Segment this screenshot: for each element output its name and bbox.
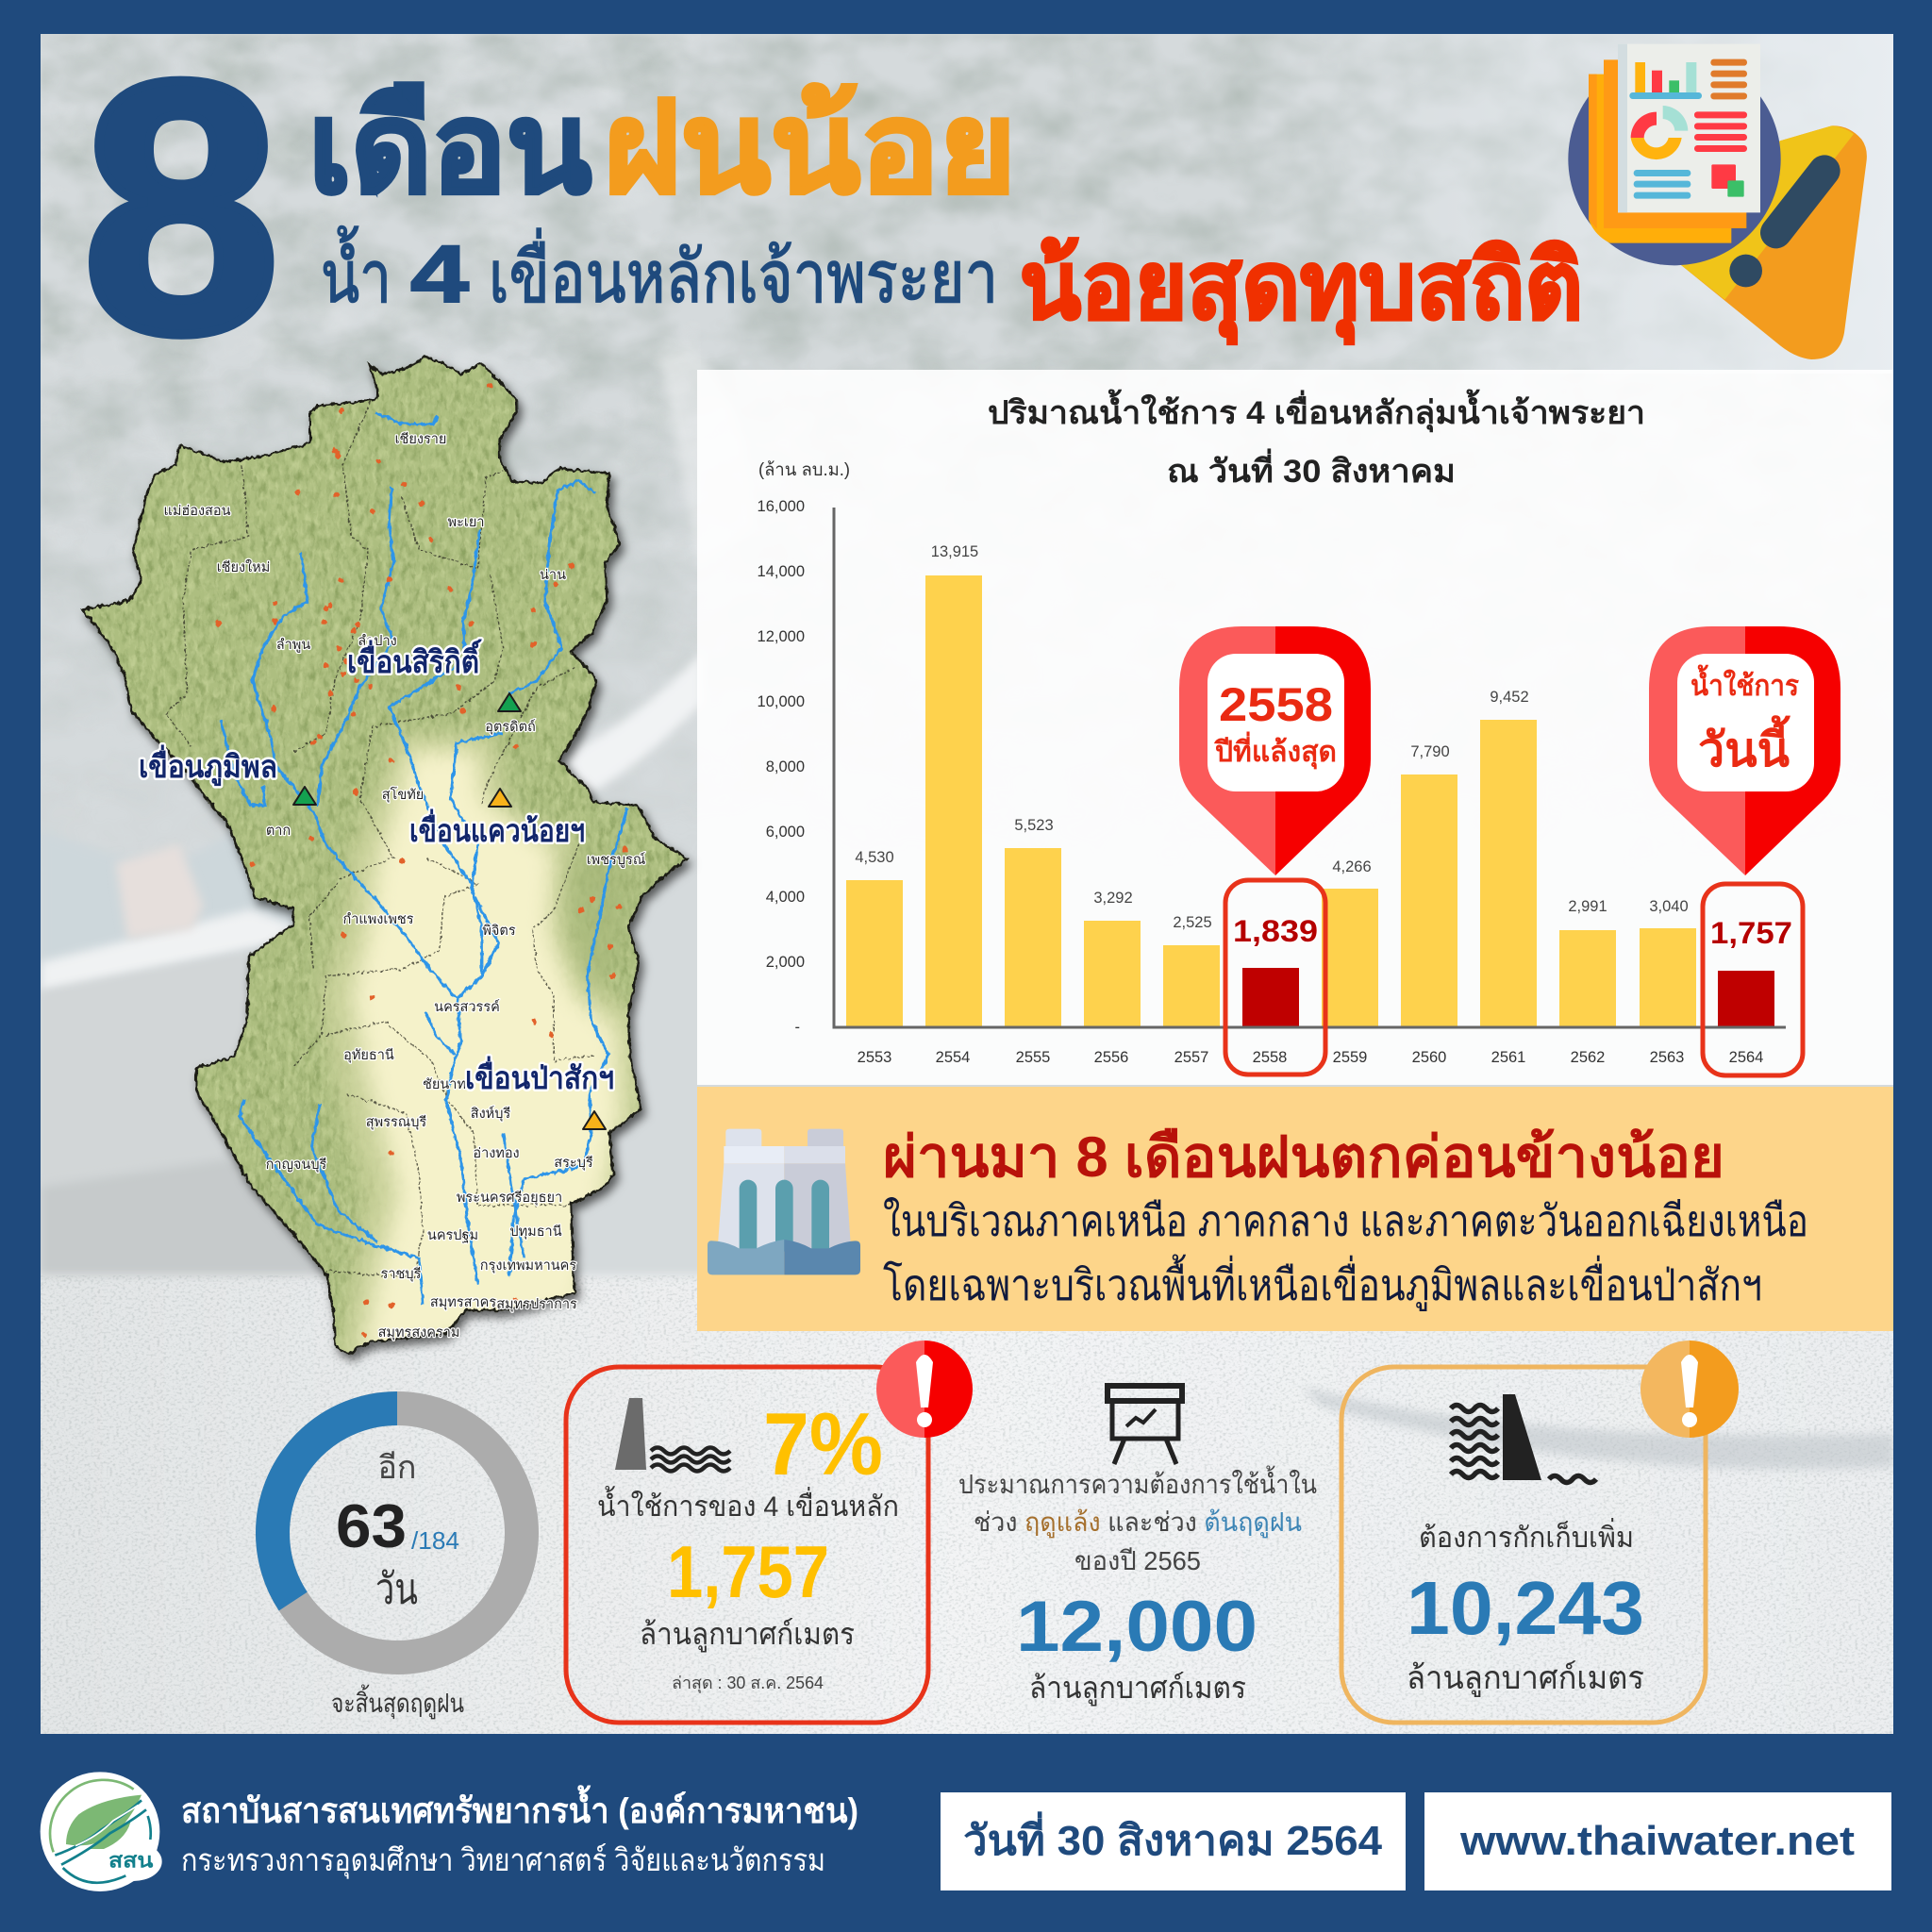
title: line 2: น้อยสุดทุบสถิติ xyxy=(1020,233,1583,344)
chart: value labels: 2,991 xyxy=(1568,898,1607,915)
title: line 1: เดือน xyxy=(308,78,591,219)
title: line 2 xyxy=(321,225,1583,344)
small reservoirs dots xyxy=(219,386,631,1335)
map: province labels: ลำปาง xyxy=(358,634,397,649)
chart: title: ปริมาณน้ำใช้การ 4 เขื่อนหลักลุ่มน้ำเจ้าพระยา xyxy=(988,389,1645,433)
map: province labels: สมุทรสาคร xyxy=(430,1295,496,1310)
chart: axes xyxy=(834,508,1786,1027)
chart: bars xyxy=(846,575,1774,1027)
chart: value labels: 5,523 xyxy=(1014,817,1054,834)
map: province labels: ตาก xyxy=(266,824,291,839)
map: province labels: สมุทรสงคราม xyxy=(378,1325,459,1341)
map: province labels: อ่างทอง xyxy=(473,1146,520,1161)
icon: orange exclamation xyxy=(1641,1341,1739,1438)
map: province labels: สิงห์บุรี xyxy=(471,1106,510,1122)
chart: y axis labels: 12,000 xyxy=(758,628,805,645)
map: dam name labels: เขื่อนสิริกิติ์ xyxy=(347,639,482,679)
card: additional storage needed 10,243: ต้องการกักเก็บเพิ่ม xyxy=(1419,1518,1634,1554)
callout pin: 2558 driest year: ปีที่แล้งสุด xyxy=(1213,731,1337,770)
icon: red exclamation xyxy=(876,1341,973,1438)
map: province labels: พะเยา xyxy=(448,515,484,530)
map: province labels: สุพรรณบุรี xyxy=(366,1114,426,1130)
footer: logo: สสน xyxy=(108,1848,153,1872)
block: forecast demand 12,000: ช่วง ฤดูแล้ง และช่วง ต้นฤดูฝน xyxy=(974,1507,1302,1539)
block: forecast demand 12,000 xyxy=(958,1386,1317,1707)
map: province labels: กำแพงเพชร xyxy=(342,912,414,927)
map: dam triangles xyxy=(293,693,606,1129)
callout pin: today's usable water: น้ำใช้การ xyxy=(1690,664,1799,702)
chart: highlight frames with values xyxy=(1225,880,1803,1075)
icon: report papers and warning sign xyxy=(1568,44,1867,359)
map: province labels: อุตรดิตถ์ xyxy=(485,719,536,735)
chart: year labels: 2562 xyxy=(1571,1049,1605,1066)
chart: year labels: 2553 xyxy=(858,1049,891,1066)
card: usable water 7%: 7% xyxy=(763,1394,883,1493)
donut: days remaining: จะสิ้นสุดฤดูฝน xyxy=(331,1684,464,1720)
title: line 2: 4 xyxy=(410,229,469,320)
map: province labels: นครปฐม xyxy=(427,1228,478,1243)
footer: date box xyxy=(941,1792,1406,1890)
map: province labels: สุโขทัย xyxy=(382,786,424,803)
panel: orange summary xyxy=(697,1087,1893,1331)
panel: orange summary: โดยเฉพาะบริเวณพื้นที่เหนือเขื่อนภูมิพลและเขื่อนป่าสักฯ xyxy=(883,1254,1762,1311)
callout pin: today's usable water: วันนี้ xyxy=(1698,715,1790,776)
map: province labels: พระนครศรีอยุธยา xyxy=(457,1190,562,1206)
chart: value labels: 4,266 xyxy=(1332,858,1372,875)
chart: year labels: 2561 xyxy=(1491,1049,1525,1066)
title: line 2: เขื่อนหลักเจ้าพระยา xyxy=(489,228,998,318)
chart: value labels: 3,292 xyxy=(1093,890,1133,907)
chart: value labels: 7,790 xyxy=(1410,743,1450,760)
chart: year labels: 2555 xyxy=(1016,1049,1050,1066)
map: province labels: ปทุมธานี xyxy=(509,1224,562,1240)
map: province labels: น่าน xyxy=(540,568,566,583)
chart: year labels: 2558 xyxy=(1253,1049,1287,1066)
donut: days remaining: วัน xyxy=(375,1564,418,1613)
card: usable water 7%: ล่าสุด : 30 ส.ค. 2564 xyxy=(672,1674,824,1693)
icon: grey dam and waves xyxy=(615,1398,730,1472)
map: dam name labels xyxy=(139,639,614,1095)
map: dam name labels: เขื่อนแควน้อยฯ xyxy=(409,808,585,848)
panel: chart background xyxy=(697,370,1893,1085)
card: usable water 7%: ล้านลูกบาศก์เมตร xyxy=(640,1617,855,1653)
chart: y axis labels: 16,000 xyxy=(758,498,805,515)
donut: days remaining: 63 xyxy=(336,1491,407,1560)
map: province labels: เพชรบูรณ์ xyxy=(587,852,645,868)
donut: days remaining xyxy=(273,1408,522,1720)
chart: highlight frames with values: 1,757 xyxy=(1710,916,1792,950)
chart: year labels: 2560 xyxy=(1412,1049,1446,1066)
map of Chao Phraya basin xyxy=(57,340,717,1369)
title: line 2: น้ำ xyxy=(321,225,391,318)
icon: presentation board xyxy=(1108,1386,1182,1464)
footer: organisation name xyxy=(181,1785,858,1879)
block: forecast demand 12,000: ของปี 2565 xyxy=(1074,1546,1201,1575)
footer: logo xyxy=(41,1772,162,1891)
chart: y axis labels: 14,000 xyxy=(758,563,805,580)
footer: website box xyxy=(1424,1792,1891,1890)
map: province labels: สมุทรปราการ xyxy=(496,1297,577,1312)
chart: year labels: 2564 xyxy=(1729,1049,1763,1066)
rivers xyxy=(221,413,627,1304)
chart: title xyxy=(988,389,1645,490)
footer: organisation name: กระทรวงการอุดมศึกษา วิทยาศาสตร์ วิจัยและนวัตกรรม xyxy=(181,1842,825,1879)
donut: days remaining: อีก xyxy=(377,1450,417,1486)
card: additional storage needed 10,243: 10,243 xyxy=(1407,1566,1644,1650)
title: big number 8: 8 xyxy=(82,7,280,408)
map: province labels: ราชบุรี xyxy=(381,1266,422,1282)
donut: days remaining: /184 xyxy=(411,1526,459,1555)
chart: year labels: 2554 xyxy=(936,1049,970,1066)
footer: website box: www.thaiwater.net xyxy=(1459,1818,1855,1864)
map: province labels: ชัยนาท xyxy=(423,1077,466,1092)
map: province labels: กรุงเทพมหานคร xyxy=(480,1258,576,1274)
panel: orange summary: ผ่านมา 8 เดือนฝนตกค่อนข้างน้อย xyxy=(883,1125,1724,1189)
card: additional storage needed 10,243 xyxy=(1341,1341,1739,1723)
chart: title: ณ วันที่ 30 สิงหาคม xyxy=(1167,448,1456,490)
chart: y axis labels: 4,000 xyxy=(766,889,805,906)
chart: y axis labels xyxy=(758,498,805,1036)
card: usable water 7% xyxy=(566,1341,973,1723)
callout pin: 2558 driest year xyxy=(1179,626,1371,875)
map: dam name labels: เขื่อนป่าสักฯ xyxy=(465,1056,614,1095)
map: province labels: นครสวรรค์ xyxy=(434,999,500,1015)
card: additional storage needed 10,243: ล้านลูกบาศก์เมตร xyxy=(1407,1660,1644,1697)
map outline xyxy=(83,357,687,1354)
title: line 1 xyxy=(308,78,1016,219)
map: province labels: สระบุรี xyxy=(554,1155,593,1171)
map: province labels: เชียงราย xyxy=(395,431,446,447)
chart: value labels: 4,530 xyxy=(855,849,894,866)
chart: value labels xyxy=(855,543,1689,931)
chart: year labels: 2559 xyxy=(1333,1049,1367,1066)
title: line 1: ฝนน้อย xyxy=(604,78,1016,219)
chart: value labels: 2,525 xyxy=(1173,914,1212,931)
map: province labels: แม่ฮ่องสอน xyxy=(163,504,231,519)
map: province labels: เชียงใหม่ xyxy=(217,558,270,575)
chart: year labels xyxy=(858,1049,1763,1066)
card: usable water 7%: 1,757 xyxy=(667,1530,829,1613)
map: province labels: ลำพูน xyxy=(276,638,310,653)
map: province labels: กาญจนบุรี xyxy=(266,1157,327,1173)
chart: y axis labels: 2,000 xyxy=(766,954,805,971)
block: forecast demand 12,000: ประมาณการความต้องการใช้น้ำใน xyxy=(958,1465,1317,1499)
chart: value labels: 13,915 xyxy=(931,543,978,560)
map: dam name labels: เขื่อนภูมิพล xyxy=(139,744,277,787)
chart: y axis labels: 8,000 xyxy=(766,758,805,775)
block: forecast demand 12,000: ล้านลูกบาศก์เมตร xyxy=(1029,1671,1246,1707)
chart: y axis labels: 10,000 xyxy=(758,693,805,710)
chart: y axis labels: 6,000 xyxy=(766,824,805,841)
province boundaries xyxy=(166,402,595,1277)
chart: unit label: (ล้าน ลบ.ม.) xyxy=(758,460,850,480)
icon: dam xyxy=(708,1129,860,1274)
icon: dark dam with high and low water xyxy=(1451,1394,1596,1483)
chart: year labels: 2557 xyxy=(1174,1049,1208,1066)
map: province labels xyxy=(163,431,645,1341)
chart: y axis labels: - xyxy=(794,1019,800,1036)
chart: value labels: 3,040 xyxy=(1649,898,1689,915)
callout pin: 2558 driest year: 2558 xyxy=(1219,678,1333,731)
callout pin: today's usable water xyxy=(1649,626,1840,875)
chart: year labels: 2556 xyxy=(1094,1049,1128,1066)
footer: date box: วันที่ 30 สิงหาคม 2564 xyxy=(963,1811,1383,1864)
chart: highlight frames with values: 1,839 xyxy=(1233,914,1318,948)
footer: organisation name: สถาบันสารสนเทศทรัพยากรน้ำ (องค์การมหาชน) xyxy=(181,1785,858,1830)
chart: value labels: 9,452 xyxy=(1490,689,1529,706)
chart: year labels: 2563 xyxy=(1650,1049,1684,1066)
block: forecast demand 12,000: 12,000 xyxy=(1016,1587,1257,1667)
map: province labels: อุทัยธานี xyxy=(343,1047,394,1063)
map: province labels: พิจิตร xyxy=(482,924,516,939)
card: usable water 7%: น้ำใช้การของ 4 เขื่อนหลัก xyxy=(597,1486,899,1523)
